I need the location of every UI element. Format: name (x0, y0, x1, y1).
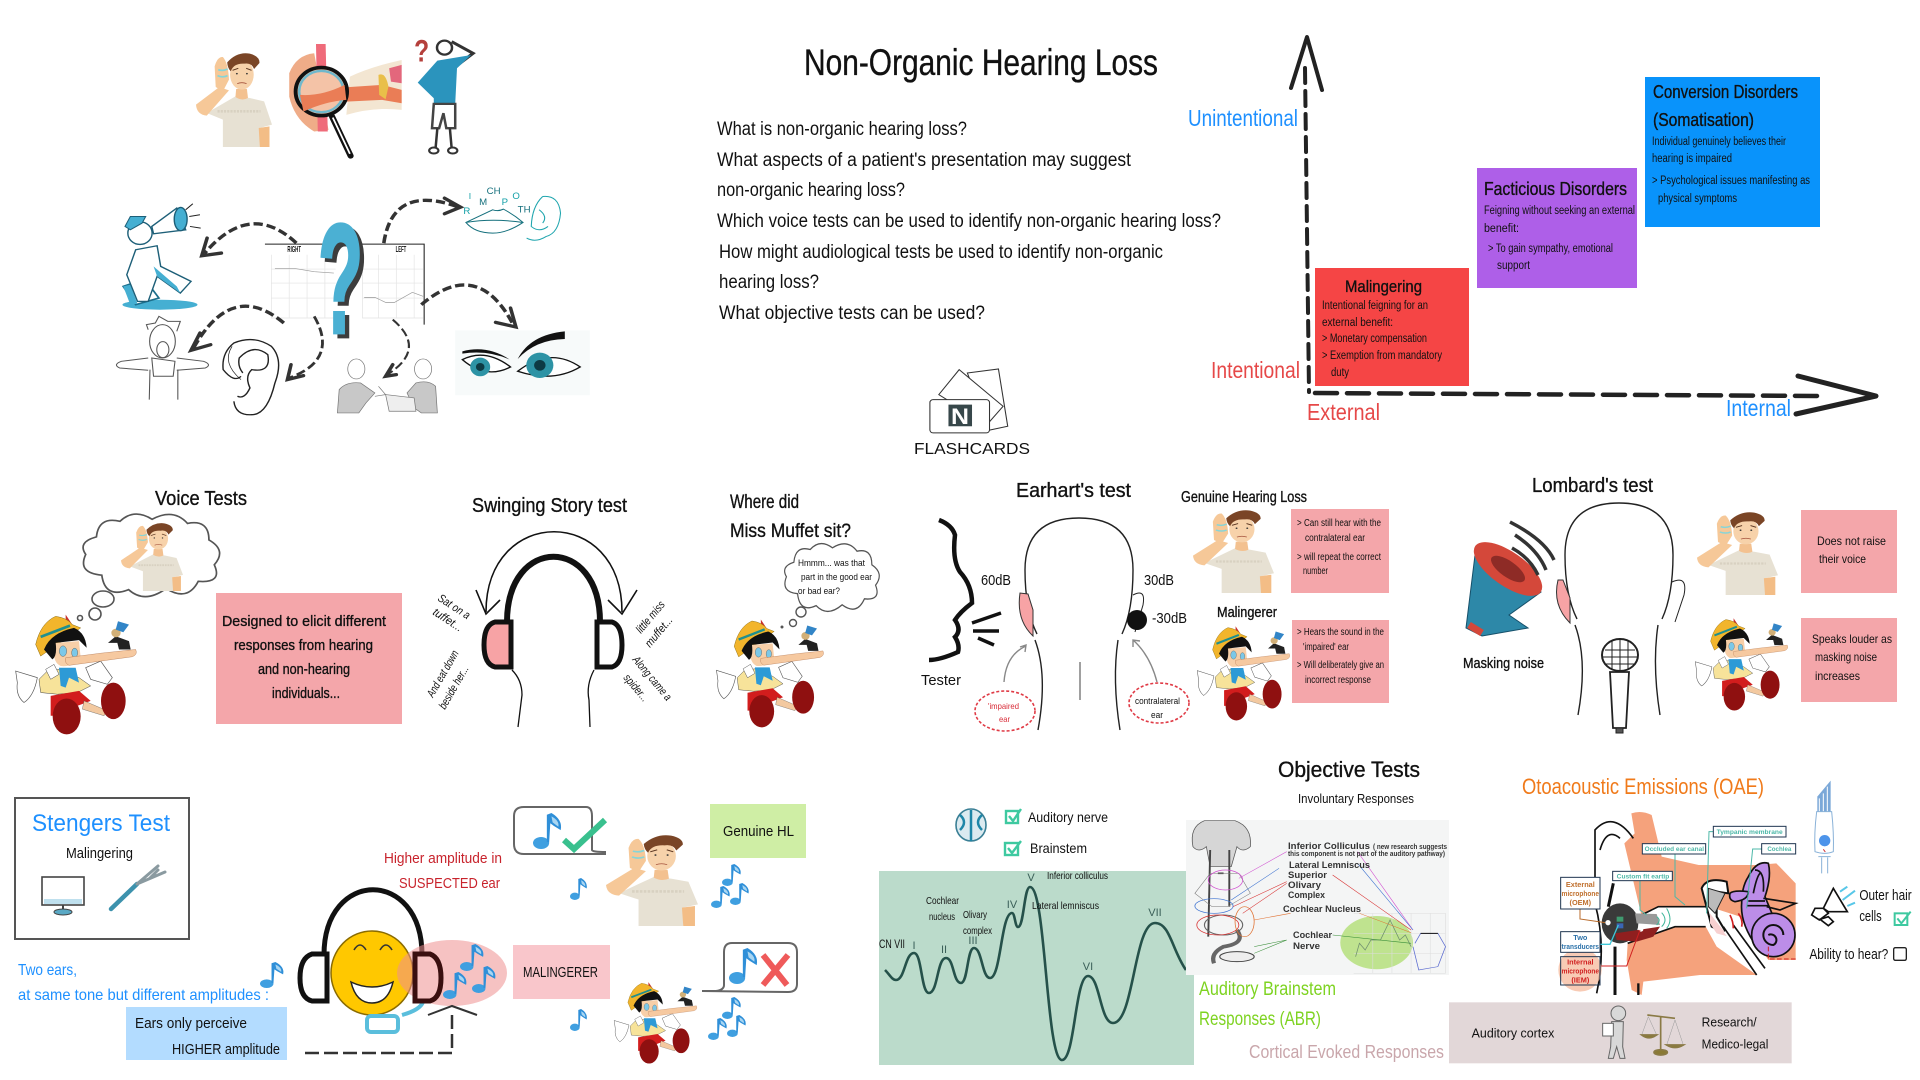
callout: speaks louder: increases (1815, 669, 1860, 683)
illustration: pinocchio (1695, 618, 1788, 710)
illustration: lips and ear with phonemes: O (512, 191, 520, 201)
callout: ears only perceive higher amplitude: Ears only perceive (135, 1015, 247, 1032)
chart: audiogram (265, 244, 424, 325)
panel: cortical evoked response uses: Research/ (1702, 1015, 1757, 1030)
text block: learning questions: Which voice tests can be used to identify non-organic hearing loss? (717, 211, 1221, 232)
callout: does not raise voice: Does not raise (1817, 534, 1886, 548)
label: intentional: Intentional (1211, 357, 1300, 383)
diagram: swinging story headphones: little miss (634, 599, 668, 636)
label: unintentional: Unintentional (1188, 105, 1298, 131)
label: impaired ear (975, 691, 1035, 731)
diagram: lombard head (1556, 503, 1685, 715)
diagram: auditory pathway anatomy: Lateral Lemniscus (1289, 860, 1370, 871)
arrows: dashed curved arrows (191, 198, 516, 380)
callout: genuine response: contralateral ear (1305, 533, 1366, 544)
panel: factitious disorders: Facticious Disorders (1484, 179, 1627, 199)
icon: large question mark (318, 192, 368, 371)
diagram: auditory pathway anatomy: ( new research suggests (1373, 844, 1447, 851)
icons: music notes (570, 997, 746, 1040)
diagram: swinging story headphones: muffet... (643, 615, 675, 650)
diagram: swinging story headphones: And eat down (425, 648, 462, 700)
illustration: confused person with question mark (414, 33, 473, 154)
heading: otoacoustic emissions: Otoacoustic Emissions (OAE) (1522, 774, 1764, 799)
panel: stengers test: Malingering (66, 845, 133, 862)
heading: voice tests: Voice Tests (155, 488, 247, 510)
label: impaired ear: 'impaired (988, 701, 1019, 711)
diagram: ear with OAE probe: (OEM) (1570, 898, 1592, 907)
callout: does not raise voice (1801, 510, 1897, 593)
chart: ABR waveform: nucleus (929, 911, 955, 923)
text block: higher amplitude in suspected ear: SUSPECTED ear (399, 875, 500, 892)
panel: malingering: external benefit: (1322, 317, 1393, 329)
illustration: man cupping ear (196, 53, 272, 147)
diagram: swinging story headphones (425, 532, 675, 727)
callout: does not raise voice: their voice (1819, 552, 1866, 566)
diagram: presentation signs around audiogram: ? (322, 196, 368, 371)
heading: auditory brainstem responses: Responses (ABR) (1199, 1009, 1321, 1030)
pointer lines (1580, 832, 1762, 966)
thought cloud: pinocchio doubt: or bad ear? (798, 586, 840, 597)
icon: masking noise megaphone (1465, 522, 1554, 636)
logo: flashcards: N (951, 404, 969, 429)
icon: doctor figure (1603, 1006, 1626, 1058)
arrow: dashed arrow to suspected ear (305, 1006, 477, 1053)
diagram: auditory pathway anatomy: Olivary (1288, 880, 1322, 891)
diagram: ear with OAE probe: Custom fit eartip (1617, 873, 1669, 880)
icon: monitor (42, 877, 84, 915)
panel: conversion disorders: > Psychological issues manifesting as (1652, 175, 1810, 187)
chart: ABR waveform: V (1027, 872, 1035, 884)
text block: learning questions: non-organic hearing loss? (717, 180, 905, 201)
callout: voice tests purpose: responses from hearing (234, 637, 373, 654)
heading: cortical evoked responses: Cortical Evoked Responses (1249, 1042, 1444, 1062)
diagram: ear with OAE probe: Two (1573, 933, 1588, 942)
illustration: man cupping ear (1193, 510, 1274, 593)
diagram: swinging story headphones: spider... (621, 672, 650, 704)
diagram: earhart head: -30dB (1152, 610, 1187, 627)
diagram: ear with OAE probe: transducers (1562, 942, 1599, 951)
panel: malingering: > Exemption from mandatory (1322, 350, 1442, 362)
thought cloud: pinocchio doubt: part in the good ear (801, 572, 872, 583)
text block: two ears explanation: Two ears, (18, 962, 77, 979)
diagram: auditory pathway anatomy: Complex (1288, 890, 1326, 901)
arrows: gray pointers to ears (1004, 640, 1157, 682)
icon: scales (1642, 1015, 1683, 1055)
callout: genuine response: > will repeat the correct (1297, 552, 1381, 563)
probe (1602, 903, 1670, 943)
diagram: auditory pathway anatomy: Cochlear (1293, 930, 1332, 941)
panel: malingering (1315, 268, 1469, 386)
illustration: suspicious eyes (455, 330, 590, 395)
text block: learning questions: What objective tests can be used? (719, 303, 985, 324)
panel: malingering: Malingering (1345, 277, 1422, 296)
label: genuine hl: Genuine HL (723, 823, 794, 840)
diagram: auditory pathway anatomy: Nerve (1293, 941, 1320, 952)
label: contralateral ear: contralateral (1135, 696, 1180, 706)
illustration: man cupping ear (606, 835, 698, 926)
illustration: pinocchio (614, 982, 697, 1064)
chart: ABR waveform: VII (1148, 907, 1162, 919)
panel: cortical evoked response uses (1449, 1002, 1792, 1063)
illustration: smiley listener with headphones (300, 890, 507, 1032)
label: external: External (1307, 399, 1380, 425)
chart: ABR waveform (879, 870, 1194, 1065)
chart: ABR waveform: CN VII (879, 937, 905, 951)
diagram: ear with OAE probe: microphone (1562, 889, 1599, 898)
diagram: earhart head (981, 518, 1187, 730)
text block: outer hair cells and ability to hear (1809, 888, 1912, 963)
diagram: tester face profile (921, 520, 1001, 689)
list: ABR sites: Auditory nerve (1028, 809, 1108, 825)
callout: malingerer response: > Will deliberately give an (1297, 660, 1384, 671)
illustration: ear outline (223, 340, 279, 415)
icon: tuning fork (111, 866, 165, 909)
callout: genuine response: > Can still hear with the (1297, 518, 1381, 529)
panel: stengers test (15, 798, 189, 939)
callout: malingerer response: incorrect response (1305, 675, 1371, 686)
illustration: clinician and patient talking (337, 359, 437, 413)
panel: factitious disorders: benefit: (1484, 223, 1519, 235)
diagram: auditory pathway anatomy: Inferior Colliculus (1288, 841, 1370, 852)
chart: ABR waveform: III (968, 935, 978, 947)
speech bubble: note with red cross (702, 943, 797, 992)
illustration: pinocchio (16, 615, 136, 734)
heading: swinging story test: Swinging Story test (472, 495, 627, 517)
text block: outer hair cells and ability to hear: Ability to hear? (1809, 947, 1888, 963)
text block: learning questions: hearing loss? (719, 272, 819, 293)
diagram: swinging story headphones: Along came a (629, 654, 674, 703)
heading: lombard's test: Lombard's test (1532, 475, 1653, 497)
heading: where did miss muffet sit: Miss Muffet sit? (730, 521, 851, 542)
icon: outer hair cell (1815, 781, 1833, 873)
illustration: lips and ear with phonemes: R (463, 206, 471, 216)
logo: flashcards: FLASHCARDS (914, 441, 1030, 458)
diagram: presentation signs around audiogram (116, 186, 590, 415)
chart: ABR waveform: VI (1083, 961, 1093, 973)
chart: ABR waveform: II (941, 944, 947, 956)
text block: higher amplitude in suspected ear (384, 850, 502, 892)
list: ABR sites: Brainstem (1030, 840, 1087, 856)
text block: higher amplitude in suspected ear: Higher amplitude in (384, 850, 502, 867)
label boxes (1561, 826, 1796, 985)
heading: where did miss muffet sit (730, 492, 851, 542)
callout: genuine response: number (1303, 566, 1328, 577)
heading: where did miss muffet sit: Where did (730, 492, 799, 513)
diagram: auditory pathway anatomy: Superior (1288, 870, 1327, 881)
label: genuine hearing loss: Genuine Hearing Loss (1181, 489, 1307, 506)
panel: conversion disorders: Individual genuinely believes their (1652, 136, 1786, 148)
callout: speaks louder: Speaks louder as (1812, 632, 1892, 646)
chart: audiogram: LEFT (396, 244, 407, 254)
text block: two ears explanation: at same tone but different amplitudes : (18, 987, 269, 1004)
callout: voice tests purpose: Designed to elicit different (222, 613, 387, 630)
highlight: pink loud sound zone (397, 940, 507, 1006)
text block: two ears explanation (18, 962, 269, 1004)
label: malingerer: Malingerer (1217, 604, 1277, 621)
diagram: ear with OAE probe: Internal (1567, 957, 1594, 966)
label: contralateral ear: ear (1151, 710, 1163, 720)
illustration: lips and ear with phonemes (463, 186, 561, 240)
callout: malingerer response: > Hears the sound in the (1297, 627, 1384, 638)
chart: ABR waveform: complex (963, 925, 993, 937)
diagram: auditory pathway anatomy (1186, 820, 1449, 975)
panel: conversion disorders: physical symptoms (1658, 193, 1737, 205)
diagram: ear with OAE probe: microphone (1562, 967, 1599, 976)
text block: learning questions: How might audiological tests be used to identify non-organic (719, 242, 1163, 263)
diagram: ear with OAE probe: (IEM) (1571, 975, 1590, 984)
chart: ABR waveform: Inferior colliculus (1047, 870, 1108, 882)
thought cloud: pinocchio doubt: Hmmm... was that (798, 558, 865, 569)
chart: ABR waveform: I (912, 940, 916, 952)
subheading: involuntary responses: Involuntary Responses (1298, 791, 1414, 806)
panel: conversion disorders: hearing is impaired (1652, 153, 1732, 165)
title: Non-Organic Hearing Loss (804, 42, 1158, 83)
text block: learning questions: What aspects of a patient's presentation may suggest (717, 150, 1132, 171)
callout: ears only perceive higher amplitude: HIGHER amplitude (172, 1041, 280, 1058)
icon: brain (956, 809, 986, 841)
label: malingerer (513, 945, 610, 999)
callout: speaks louder: masking noise (1815, 650, 1877, 664)
illustration: confused person with question mark: ? (414, 33, 429, 68)
text block: learning questions (717, 119, 1221, 324)
chart: audiogram: RIGHT (287, 244, 301, 254)
chart: ABR waveform: IV (1007, 899, 1018, 911)
text block: learning questions: What is non-organic hearing loss? (717, 119, 967, 140)
diagram: earhart head: 30dB (1144, 572, 1174, 589)
diagram: ear with OAE probe: Tympanic membrane (1717, 829, 1783, 836)
callout: voice tests purpose: individuals... (272, 685, 340, 702)
label: genuine hl (710, 804, 806, 858)
chart: ABR waveform: Cochlear (926, 895, 959, 907)
label: internal: Internal (1726, 395, 1791, 421)
chart: ABR waveform: Lateral lemniscus (1032, 900, 1099, 912)
panel: conversion disorders: (Somatisation) (1653, 110, 1754, 130)
panel: conversion disorders: Conversion Disorders (1653, 82, 1798, 102)
icons: music notes (570, 864, 749, 908)
list: ABR sites (1005, 809, 1108, 856)
callout: voice tests purpose (216, 593, 402, 724)
heading: objective tests: Objective Tests (1278, 757, 1420, 782)
illustration: man cupping ear (1697, 512, 1778, 595)
panel: factitious disorders: > To gain sympathy, emotional (1488, 243, 1613, 255)
illustration: lips and ear with phonemes: P (502, 197, 508, 207)
callout: voice tests purpose: and non-hearing (258, 661, 350, 678)
callout: genuine response (1291, 509, 1389, 593)
callout: speaks louder (1801, 618, 1897, 702)
panel: stengers test: Stengers Test (32, 810, 170, 837)
panel: malingering: Intentional feigning for an (1322, 300, 1428, 312)
illustration: ear anatomy under magnifying glass (289, 44, 402, 156)
panel: factitious disorders (1477, 168, 1637, 288)
illustration: pinocchio (1197, 626, 1290, 720)
speech bubble: note heard with tick (514, 807, 606, 854)
diagram: ear with OAE probe (1558, 812, 1796, 995)
panel: cortical evoked response uses: Medico-legal (1702, 1037, 1768, 1052)
heading: earhart's test: Earhart's test (1016, 480, 1131, 502)
panel: malingering: duty (1331, 367, 1349, 379)
illustration: lips and ear with phonemes: I (469, 192, 471, 201)
thought cloud: pinocchio doubt (780, 544, 879, 628)
icon: microphone (1602, 639, 1638, 733)
panel: cortical evoked response uses: Auditory cortex (1472, 1026, 1555, 1041)
diagram: swinging story headphones: Sat on a (435, 592, 472, 622)
illustration: man with megaphone (122, 204, 201, 310)
panel: factitious disorders: support (1497, 260, 1531, 272)
heading: auditory brainstem responses: Auditory Brainstem (1199, 979, 1336, 1000)
panel: factitious disorders: Feigning without seeking an external (1484, 205, 1635, 217)
cochlea and semicircular canals (1730, 863, 1796, 959)
callout: malingerer response (1292, 620, 1389, 703)
diagram: earhart head: 60dB (981, 572, 1011, 589)
logo: flashcards (914, 369, 1030, 458)
heading: auditory brainstem responses (1199, 979, 1336, 1030)
label: malingerer: MALINGERER (523, 964, 598, 981)
text block: outer hair cells and ability to hear: cells (1859, 909, 1882, 925)
illustration: pinocchio (716, 619, 824, 727)
diagram: auditory pathway anatomy: this component is not part of the auditory pathway) (1288, 851, 1445, 858)
icon: black megaphone (1812, 887, 1855, 926)
label: impaired ear: ear (999, 714, 1010, 724)
icon: music note (260, 962, 283, 988)
diagram: presentation signs around audiogram: ? (318, 192, 363, 367)
diagram: ear with OAE probe: Cochlea (1767, 846, 1792, 853)
chart: ABR waveform: Olivary (963, 909, 988, 921)
illustration: lips and ear with phonemes: M (479, 197, 487, 207)
chart: intention axes (1188, 37, 1876, 425)
illustration: lips and ear with phonemes: CH (487, 186, 501, 196)
label: tester: Tester (921, 672, 961, 689)
diagram: ear with OAE probe: External (1566, 880, 1595, 889)
illustration: lips and ear with phonemes: TH (518, 205, 531, 214)
diagram: swinging story headphones: beside her... (437, 664, 472, 712)
label: contralateral ear (1129, 683, 1189, 723)
callout: malingerer response: 'impaired' ear (1303, 642, 1350, 653)
label: masking noise: Masking noise (1463, 655, 1544, 672)
diagram: ear with OAE probe: Occluded ear canal (1645, 846, 1704, 853)
diagram: swinging story headphones: tuffet... (430, 606, 465, 634)
panel: malingering: > Monetary compensation (1322, 333, 1427, 345)
thought cloud with man (78, 514, 220, 620)
diagram: auditory pathway anatomy: Cochlear Nucleus (1283, 904, 1361, 915)
panel: conversion disorders (1645, 77, 1820, 227)
callout: ears only perceive higher amplitude (126, 1007, 287, 1060)
illustration: person covering ears (116, 316, 208, 400)
